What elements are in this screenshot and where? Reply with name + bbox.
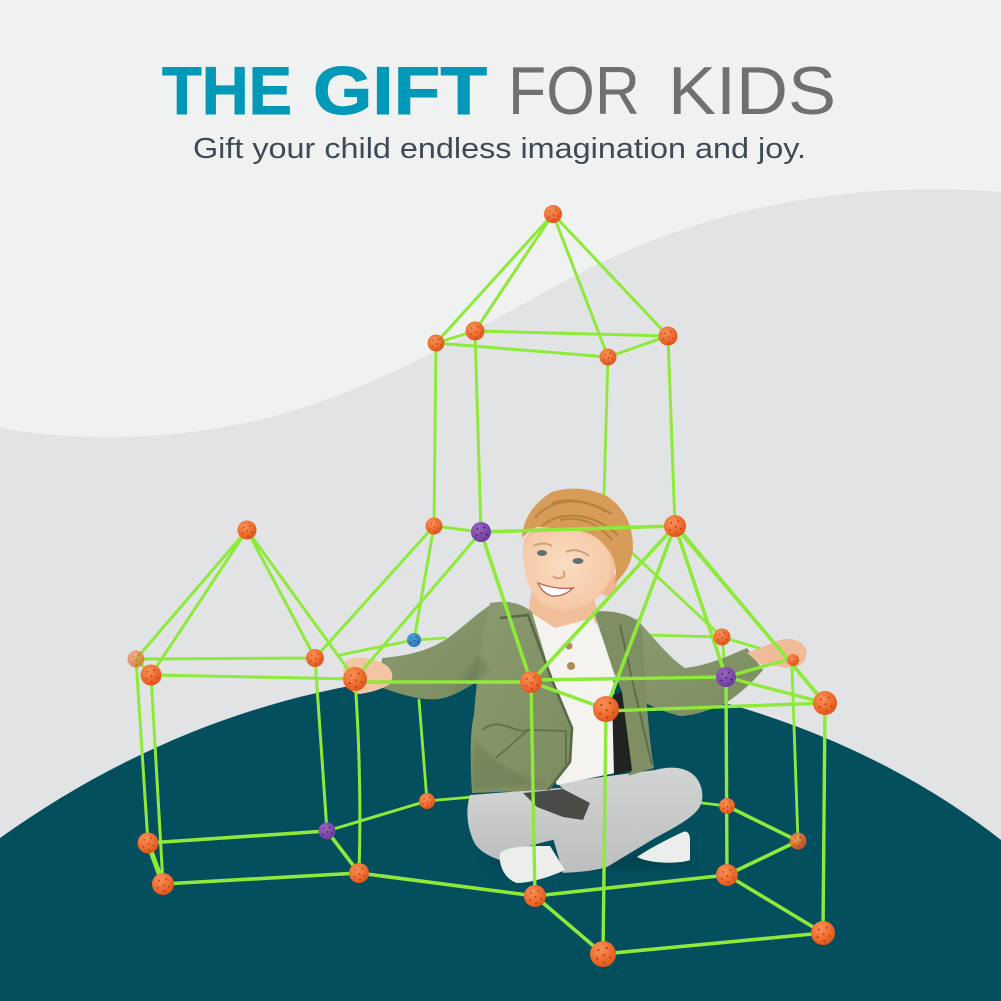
left sock <box>500 846 565 883</box>
jacket soft shadow <box>450 655 548 790</box>
floor rods <box>148 843 163 884</box>
right sleeve <box>635 618 763 716</box>
neck <box>528 590 600 640</box>
left sleeve <box>380 605 492 699</box>
dark waistband shadow <box>523 789 590 820</box>
pocket and hood seams <box>482 615 652 790</box>
jacket left panel <box>471 602 572 793</box>
middle frame rods <box>315 526 481 679</box>
left house rods <box>136 530 360 884</box>
horizontal waist rods <box>355 658 825 711</box>
title: KIDS <box>668 53 836 129</box>
top tower rods <box>434 214 675 532</box>
right sock <box>637 832 690 863</box>
dark inner jacket <box>612 692 633 775</box>
connector balls <box>128 205 837 967</box>
boy <box>343 489 807 883</box>
title: GIFT <box>313 53 487 129</box>
smile <box>538 583 573 596</box>
floor shadow <box>485 850 695 870</box>
title: FOR <box>508 53 640 129</box>
white shirt <box>530 612 620 785</box>
rods in front of the boy <box>136 214 825 954</box>
shirt buttons <box>566 642 575 670</box>
jacket right panel <box>594 611 654 776</box>
title: THE <box>162 53 292 129</box>
title <box>162 53 836 129</box>
hair <box>522 489 633 584</box>
eyes <box>537 550 584 564</box>
trousers <box>467 768 702 873</box>
eyebrows <box>533 544 589 556</box>
vertical rods <box>531 677 825 954</box>
ear <box>597 568 617 596</box>
right hand <box>747 639 807 668</box>
face <box>523 525 617 614</box>
left hand <box>343 658 392 694</box>
teal floor shape <box>0 672 1001 1001</box>
nose <box>553 571 564 578</box>
subtitle: Gift your child endless imagination and joy. <box>193 133 806 165</box>
rods behind the boy <box>327 357 798 841</box>
